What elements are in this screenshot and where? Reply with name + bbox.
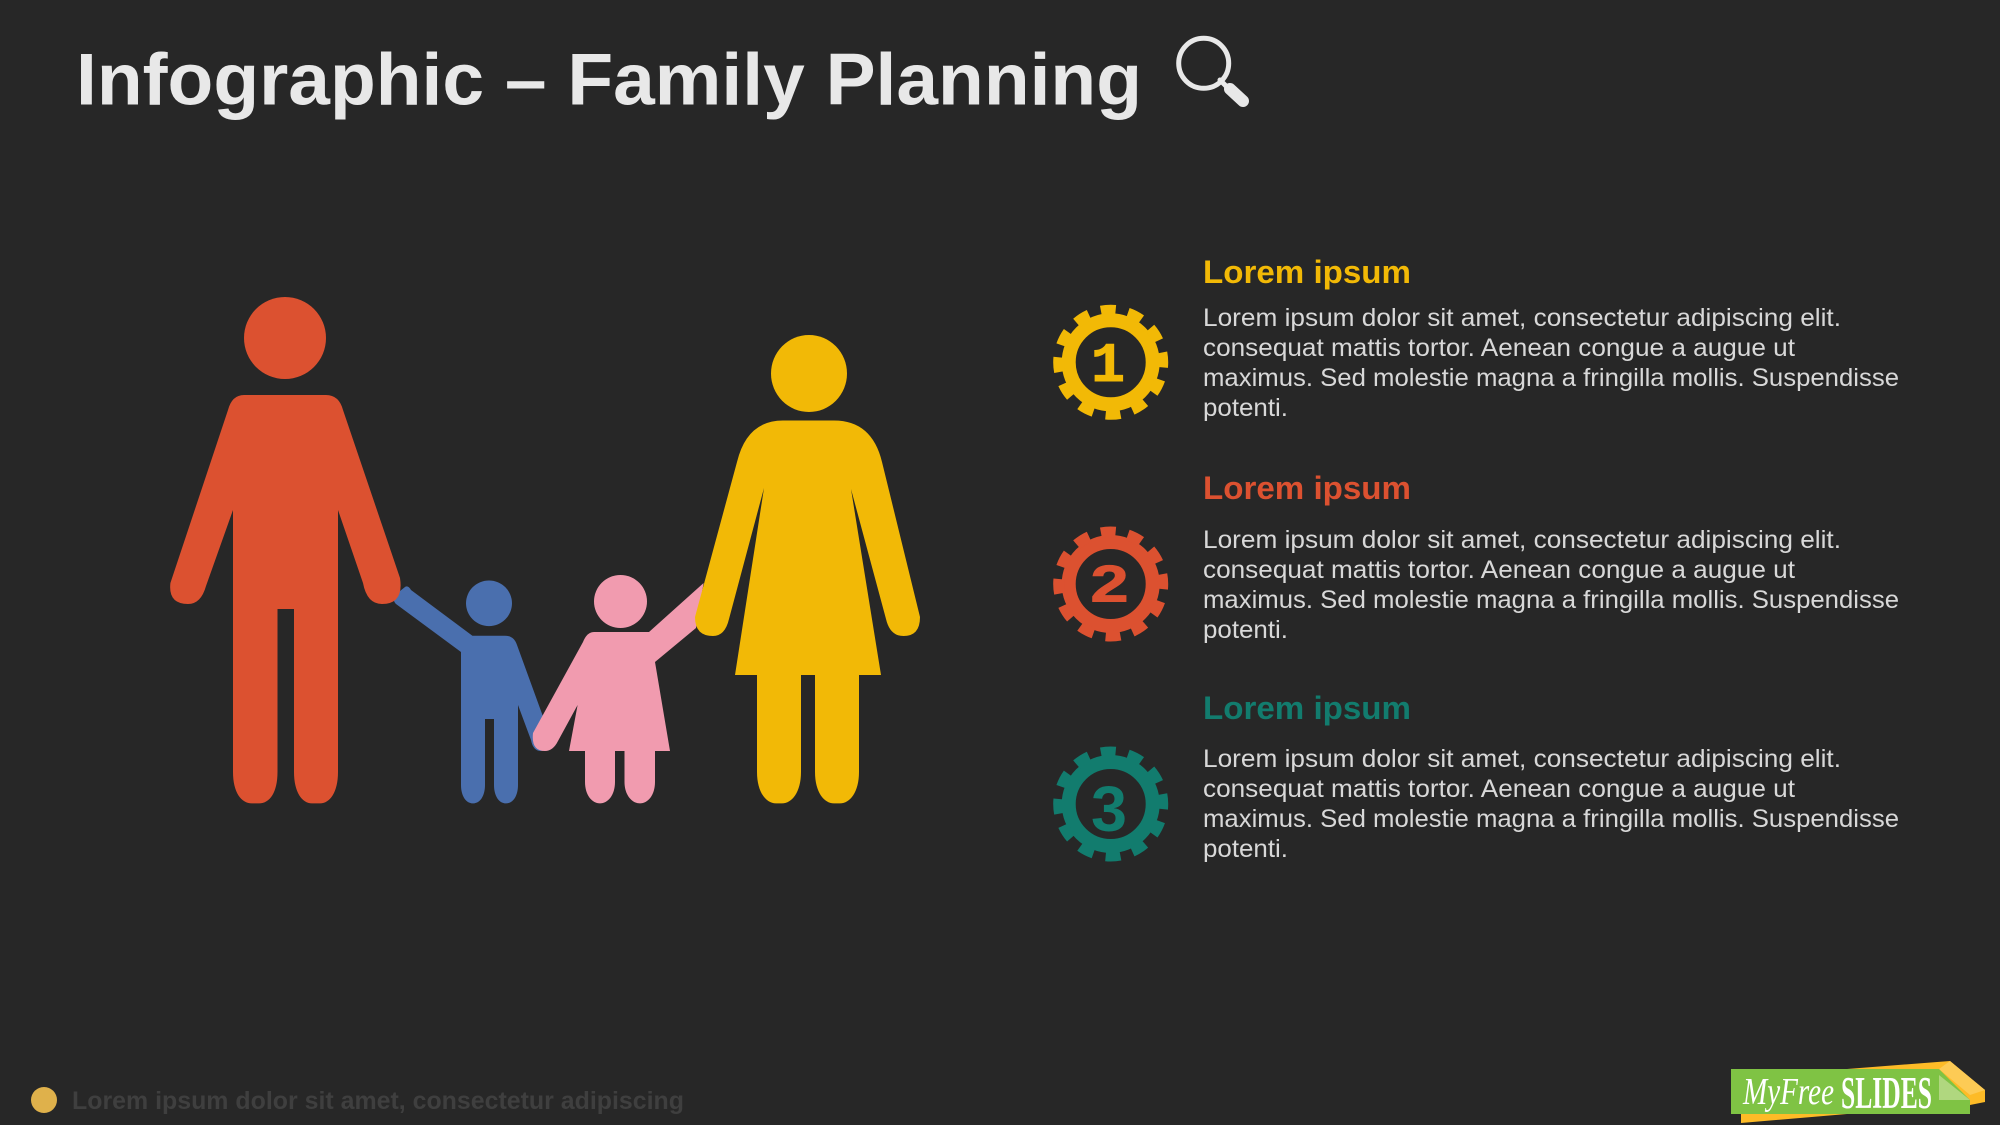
text block 2: maximus. Sed molestie magna a fringilla mollis. Suspendisse [1203,586,1899,614]
icon: gear 3: 3 [1091,773,1127,845]
text block 3 [1203,745,1899,863]
icon: gear 2 [1050,523,1171,645]
family illustration [170,297,920,803]
icon: gear 2: 2 [1090,556,1128,614]
footer bullet dot [31,1087,57,1113]
figure: mother [695,335,920,803]
icon: gear 1: 1 [1091,334,1125,398]
title: Infographic – Family Planning [76,40,1142,120]
text block 1 [1203,304,1899,422]
text block 2: consequat mattis tortor. Aenean congue a augue ut [1203,556,1795,584]
logo: MyFreeSlides: MyFree [1742,1071,1834,1113]
icon: gear 1 [1050,302,1171,423]
icon: gear 3 [1050,743,1171,865]
text block 2 [1203,526,1899,644]
text block 1: potenti. [1203,394,1288,422]
text block 2: potenti. [1203,616,1288,644]
text block 3: potenti. [1203,835,1288,863]
item 3 [1050,690,1899,865]
text block 3: maximus. Sed molestie magna a fringilla mollis. Suspendisse [1203,805,1899,833]
footer text: Lorem ipsum dolor sit amet, consectetur adipiscing [72,1087,684,1115]
text block 3: Lorem ipsum dolor sit amet, consectetur adipiscing elit. [1203,745,1841,773]
heading 2: Lorem ipsum [1203,470,1411,506]
text block 2: Lorem ipsum dolor sit amet, consectetur adipiscing elit. [1203,526,1841,554]
figure: boy [394,580,548,803]
text block 3: consequat mattis tortor. Aenean congue a augue ut [1203,775,1795,803]
item 2 [1050,470,1899,645]
heading 1: Lorem ipsum [1203,254,1411,290]
item 1 [1050,254,1899,423]
heading 3: Lorem ipsum [1203,690,1411,726]
figure: father [170,297,401,803]
text block 1: consequat mattis tortor. Aenean congue a augue ut [1203,334,1795,362]
logo: MyFreeSlides [1731,1061,1985,1123]
icon: magnifying glass [1179,38,1243,101]
text block 1: maximus. Sed molestie magna a fringilla mollis. Suspendisse [1203,364,1899,392]
figure: girl [533,575,704,803]
text block 1: Lorem ipsum dolor sit amet, consectetur adipiscing elit. [1203,304,1841,332]
logo: MyFreeSlides: SLIDES [1841,1068,1932,1118]
